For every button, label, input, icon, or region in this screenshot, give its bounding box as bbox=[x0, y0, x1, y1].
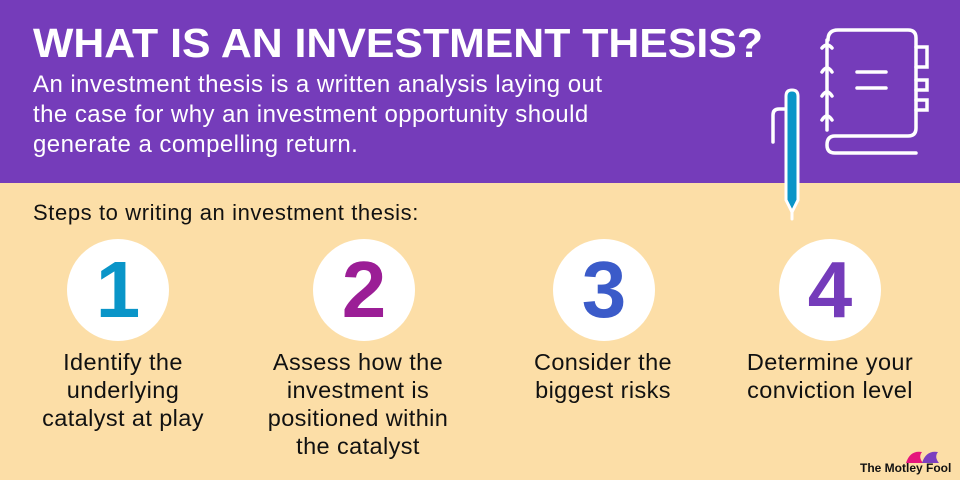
title: WHAT IS AN INVESTMENT THESIS? bbox=[33, 20, 763, 66]
step 4: conviction level bbox=[747, 377, 913, 403]
step 1 bbox=[42, 239, 204, 431]
step 2: investment is bbox=[287, 377, 429, 403]
step 4: Determine your bbox=[747, 349, 913, 375]
heading: steps: Steps to writing an investment thesis: bbox=[33, 200, 419, 225]
logo: The Motley Fool: The Motley Fool bbox=[860, 461, 951, 475]
step 3 bbox=[534, 239, 672, 403]
step 4: 4 bbox=[808, 245, 852, 334]
subtitle text: generate a compelling return. bbox=[33, 131, 358, 158]
icon: notebook and pen bbox=[771, 28, 929, 220]
step 2: positioned within bbox=[268, 405, 448, 431]
step 2: 2 bbox=[342, 245, 386, 334]
subtitle text: the case for why an investment opportunity should bbox=[33, 101, 589, 128]
step 3: biggest risks bbox=[535, 377, 671, 403]
step 2 bbox=[268, 239, 448, 459]
subtitle text bbox=[33, 71, 602, 158]
step 1: underlying bbox=[67, 377, 179, 403]
step 1: catalyst at play bbox=[42, 405, 204, 431]
subtitle text: An investment thesis is a written analysis laying out bbox=[33, 71, 602, 98]
step 2: Assess how the bbox=[273, 349, 443, 375]
step 3: 3 bbox=[582, 245, 626, 334]
step 1: 1 bbox=[96, 245, 140, 334]
step 1: Identify the bbox=[63, 349, 183, 375]
step 4 bbox=[747, 239, 913, 403]
header band bbox=[0, 0, 960, 183]
step 3: Consider the bbox=[534, 349, 672, 375]
step 2: the catalyst bbox=[296, 433, 420, 459]
logo: The Motley Fool bbox=[860, 452, 951, 475]
